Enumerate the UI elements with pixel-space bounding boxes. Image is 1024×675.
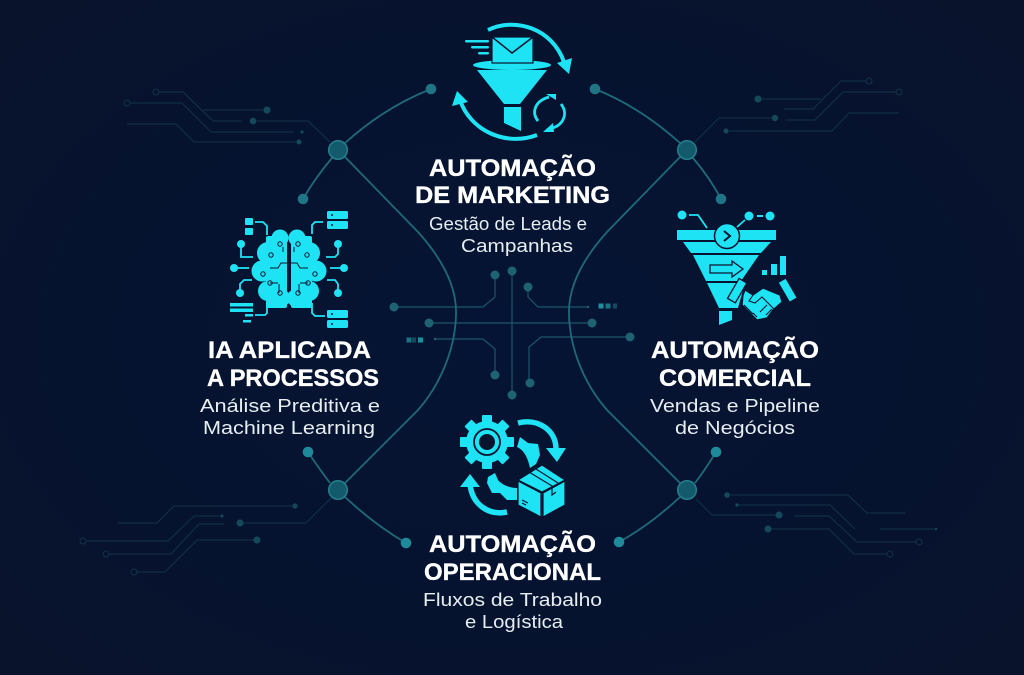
icon: sales funnel with handshake: [677, 210, 797, 325]
cycle arrows: [470, 422, 556, 513]
text block: marketing: Gestão de Leads e: [429, 213, 587, 234]
text block: AI processes: Análise Preditiva e: [200, 395, 380, 416]
brain connectors: [234, 222, 344, 316]
text block: marketing: DE MARKETING: [415, 182, 610, 209]
connector network: [303, 89, 721, 543]
text block: commercial: Vendas e Pipeline: [650, 395, 820, 416]
text block: marketing: AUTOMAÇÃO: [429, 154, 596, 182]
text block: commercial: [650, 336, 820, 438]
text block: operational: OPERACIONAL: [424, 559, 601, 586]
text block: operational: e Logística: [465, 611, 564, 632]
circuit traces: top left: [124, 89, 330, 144]
circuit traces: top right: [695, 78, 902, 142]
main gear: [460, 415, 514, 469]
central circuit board: [390, 266, 634, 400]
circuit traces: bottom right: [696, 492, 937, 557]
circuit traces: bottom left: [80, 498, 331, 575]
text block: operational: AUTOMAÇÃO: [429, 530, 596, 558]
box: [518, 465, 565, 517]
text block: marketing: [415, 154, 610, 256]
handshake: [728, 278, 797, 320]
text block: commercial: AUTOMAÇÃO: [651, 336, 819, 364]
icon: gears, arrows and box: [460, 415, 566, 517]
text block: AI processes: A PROCESSOS: [207, 365, 379, 392]
text block: AI processes: Machine Learning: [203, 417, 375, 438]
connector nodes: [298, 84, 726, 548]
text block: commercial: de Negócios: [675, 417, 795, 438]
text block: operational: Fluxos de Trabalho: [423, 589, 602, 610]
brain lobes: [252, 230, 326, 308]
text block: AI processes: [200, 337, 380, 438]
icon: marketing funnel with envelope: [452, 25, 572, 139]
text block: marketing: Campanhas: [461, 235, 573, 256]
text block: AI processes: IA APLICADA: [208, 337, 371, 364]
secondary gear: [517, 437, 540, 468]
text block: operational: [423, 530, 602, 632]
text block: commercial: COMERCIAL: [659, 365, 811, 392]
icon: AI brain circuit: [230, 211, 348, 328]
